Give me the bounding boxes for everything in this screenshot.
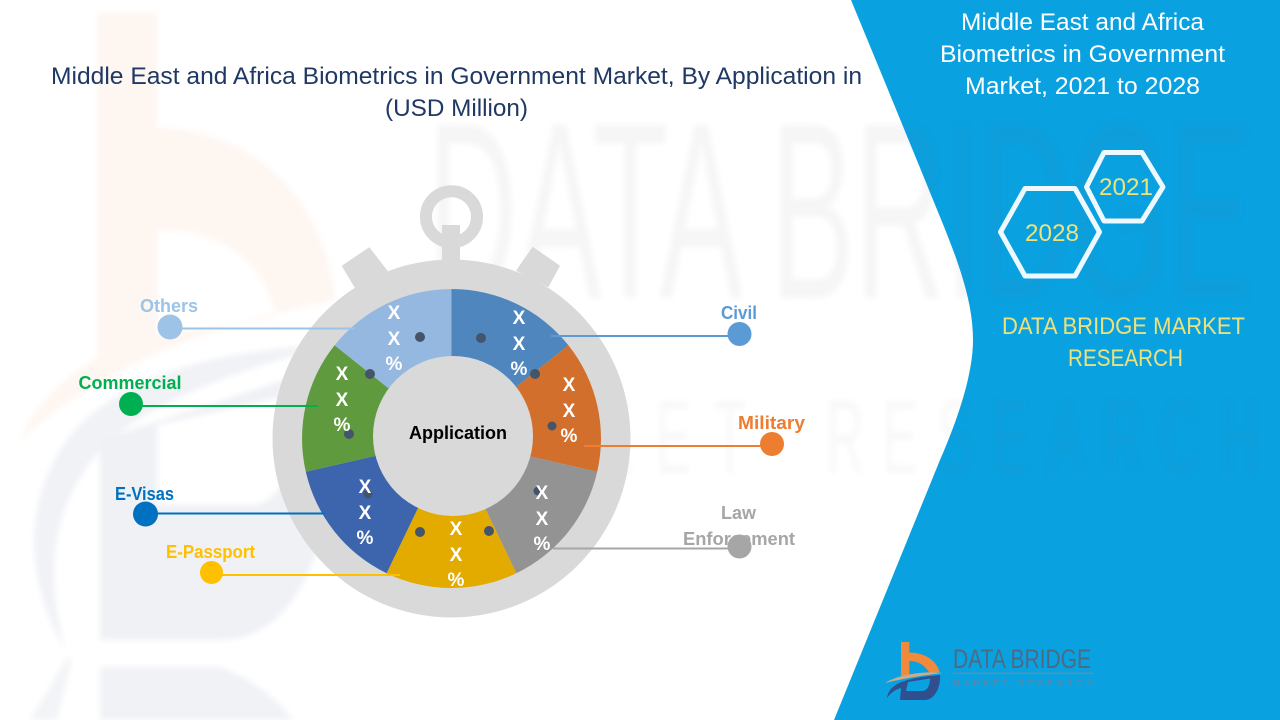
segment value: e-visas: X — [359, 503, 372, 524]
segment value: law enforcement: X — [536, 509, 549, 530]
callout: others: Others — [140, 296, 198, 316]
segment value: e-passport: X — [450, 519, 463, 540]
panel title: Middle East and Africa — [961, 9, 1205, 36]
callout: law enforcement: Enforcement — [683, 529, 795, 549]
callout: others — [140, 296, 355, 340]
callout: commercial: Commercial — [78, 373, 182, 393]
company name text — [1002, 313, 1245, 372]
title: (USD Million) — [385, 95, 528, 122]
hexagon: 2028: 2028 — [1025, 220, 1079, 247]
segment value: military: X — [563, 401, 576, 422]
segment value: commercial: X — [336, 364, 349, 385]
panel: blue side panel — [834, 0, 1280, 720]
callout: e-passport: E-Passport — [166, 542, 255, 562]
segment value: others: % — [386, 354, 403, 375]
callout: civil — [551, 303, 757, 346]
logo: Data Bridge: MARKET RESEARCH — [953, 679, 1092, 688]
center hub — [373, 356, 533, 516]
panel title: Market, 2021 to 2028 — [965, 73, 1200, 100]
company name text: RESEARCH — [1068, 345, 1183, 372]
segment value: e-visas: X — [359, 477, 372, 498]
segment value: e-visas — [357, 477, 374, 549]
watermark: logo mark — [20, 13, 335, 720]
pie segments — [302, 289, 601, 588]
segment value: military: X — [563, 375, 576, 396]
segment value: e-passport: X — [450, 545, 463, 566]
marker dots — [344, 332, 556, 537]
company name text: DATA BRIDGE MARKET — [1002, 313, 1245, 340]
callout: law enforcement — [553, 503, 795, 558]
segment value: military — [561, 375, 578, 447]
segment value: law enforcement: X — [536, 483, 549, 504]
hexagon: 2021 — [1086, 152, 1163, 221]
panel title: Biometrics in Government — [940, 41, 1225, 68]
callout: law enforcement: Law — [721, 503, 757, 523]
logo: Data Bridge: DATA BRIDGE — [953, 644, 1091, 674]
segment value: others — [386, 303, 403, 375]
logo: Data Bridge — [885, 642, 1094, 700]
segment value: civil: % — [511, 359, 528, 380]
watermark: company name: MARKET RESEARCH — [428, 378, 1259, 496]
callout: civil: Civil — [721, 303, 757, 323]
segment value: commercial: X — [336, 390, 349, 411]
segment value: others: X — [388, 329, 401, 350]
segment value: law enforcement — [534, 483, 551, 555]
watermark: company name — [427, 71, 1259, 496]
segment value: e-visas: % — [357, 528, 374, 549]
segment value: others: X — [388, 303, 401, 324]
segment value: civil: X — [513, 334, 526, 355]
watermark on blue panel — [902, 124, 968, 460]
segment value: e-passport — [448, 519, 465, 591]
segment value: civil: X — [513, 308, 526, 329]
segment value: commercial: % — [334, 415, 351, 436]
callout: e-passport — [166, 542, 400, 584]
segment value: e-passport: % — [448, 570, 465, 591]
title: Middle East and Africa Biometrics in Government Market, By Application in — [51, 63, 862, 90]
hexagon: 2021: 2021 — [1099, 174, 1153, 201]
stopwatch body — [272, 191, 630, 617]
panel title — [940, 9, 1225, 100]
callout: commercial — [78, 373, 318, 416]
segment value: commercial — [334, 364, 351, 436]
watermark on blue panel: MARKET RESEARCH — [428, 378, 1259, 496]
segment value: law enforcement: % — [534, 534, 551, 555]
center hub: Application — [409, 423, 507, 443]
segment value: military: % — [561, 426, 578, 447]
callout: e-visas: E-Visas — [115, 484, 174, 504]
callout: military — [584, 413, 805, 456]
title — [51, 63, 862, 122]
hexagon: 2028 — [1000, 188, 1100, 276]
segment value: civil — [511, 308, 528, 380]
callout: military: Military — [738, 413, 805, 433]
callout: e-visas — [115, 484, 325, 526]
